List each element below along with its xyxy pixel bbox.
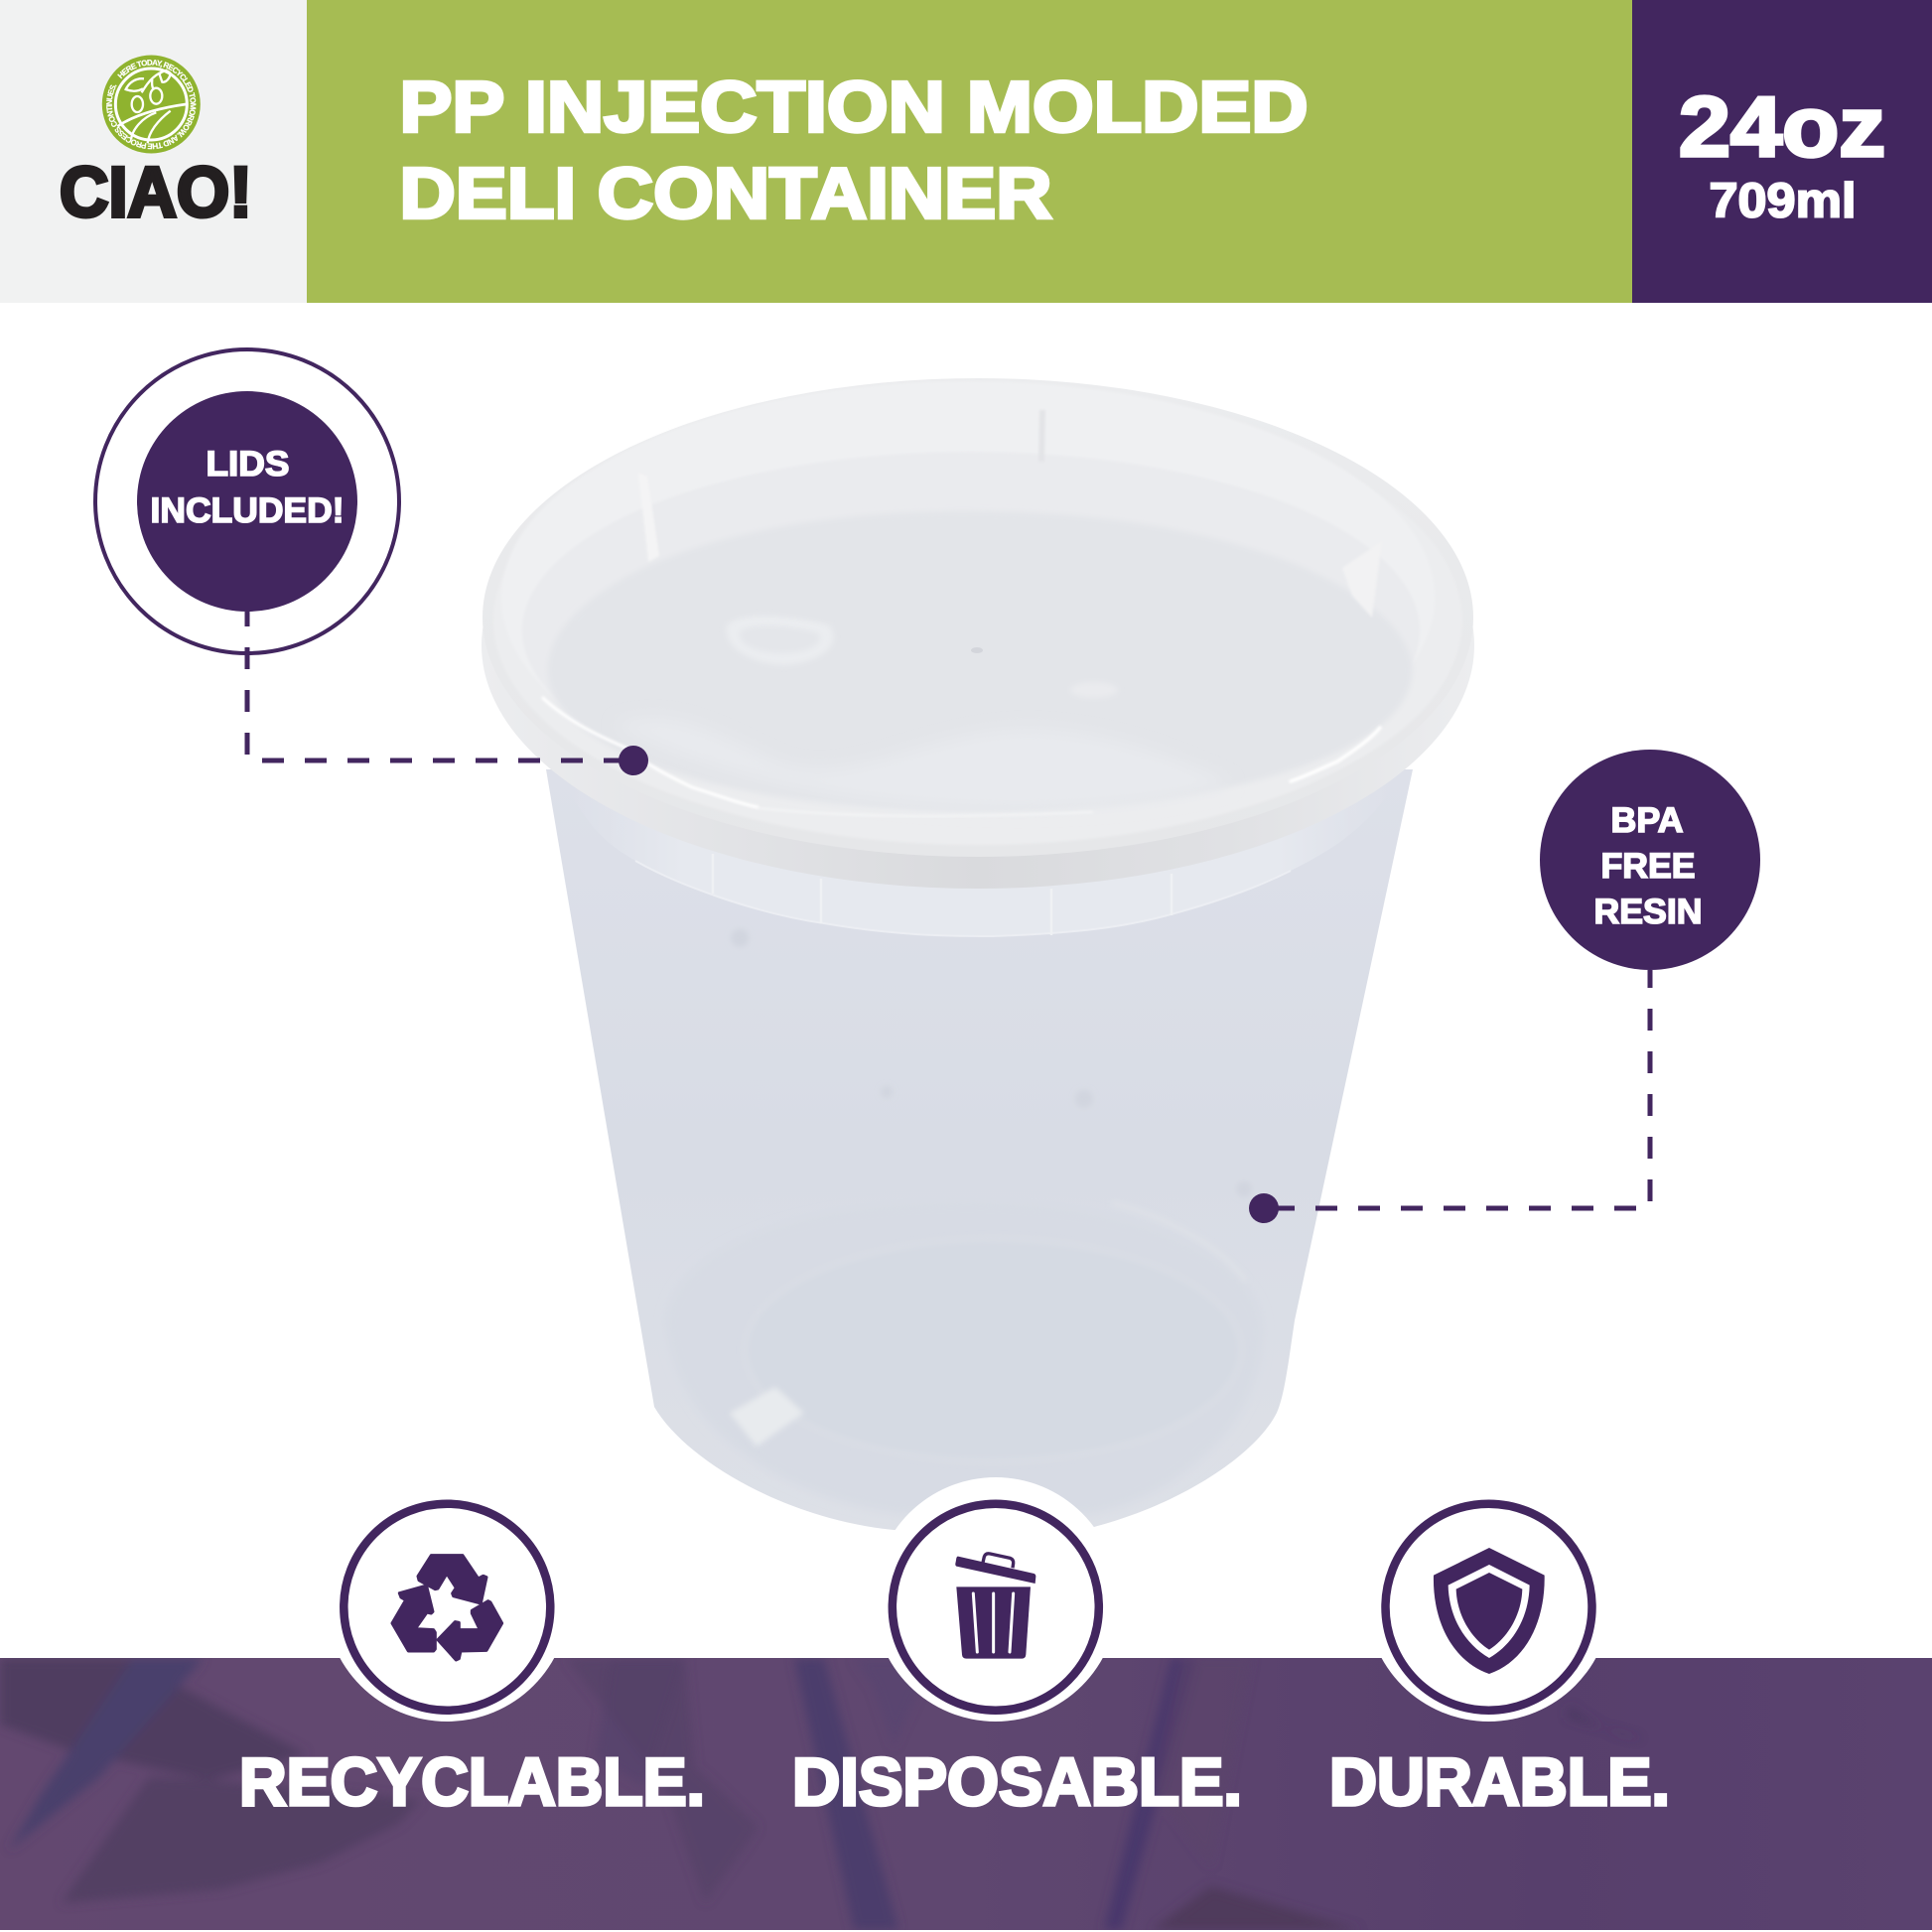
lid outer rim <box>483 378 1473 857</box>
callout text <box>1594 800 1702 931</box>
label: recyclable: RECYCLABLE. <box>239 1744 705 1820</box>
product image: deli container with lid <box>482 378 1474 1530</box>
callout ring <box>95 349 399 653</box>
callout dot <box>1249 1193 1279 1223</box>
icon halo: recyclable <box>325 1477 569 1722</box>
title: DELI CONTAINER <box>399 155 1052 234</box>
callout: lids included <box>95 349 648 775</box>
lid inner edge <box>501 381 1435 814</box>
wordmark: CIAO!: CIAO! <box>60 154 252 232</box>
title: PP INJECTION MOLDED <box>399 68 1309 147</box>
label: durable: DURABLE. <box>1329 1744 1670 1820</box>
callout text: RESIN <box>1594 892 1702 931</box>
lid inner wall <box>522 452 1420 809</box>
panel: title banner <box>307 0 1632 303</box>
lid edge highlights <box>543 698 1380 816</box>
callout text: INCLUDED! <box>151 490 344 530</box>
callout disc <box>137 391 357 612</box>
icon: recycle <box>344 1504 550 1711</box>
lid flat panel <box>548 511 1412 812</box>
callout text: BPA <box>1610 800 1684 840</box>
lid surface details <box>616 617 1231 809</box>
callout text <box>151 444 344 530</box>
callout dot <box>619 746 648 775</box>
size label: 709ml <box>1710 175 1857 228</box>
title <box>399 68 1309 234</box>
callout connector <box>1273 970 1650 1208</box>
panel: purple foliage band <box>0 1657 1932 1930</box>
panel: logo background <box>0 0 307 303</box>
callout text: LIDS <box>207 444 290 483</box>
icon halo: durable <box>1366 1477 1610 1722</box>
lid tabs <box>638 410 1382 618</box>
container body <box>546 769 1413 1530</box>
callout text: FREE <box>1600 846 1696 886</box>
lid rim soft highlight <box>493 396 1462 845</box>
container lower rim <box>482 402 1474 889</box>
icon: recycled badge: HERE TODAY, RECYCLED TOMORROW. AND THE PROCESS CONTINUES. <box>106 60 197 149</box>
icon: trash can <box>893 1504 1099 1711</box>
icon halo: disposable <box>874 1477 1118 1722</box>
callout connector <box>247 612 625 760</box>
icon: shield <box>1386 1504 1592 1711</box>
size label <box>1679 80 1885 228</box>
size label: 24oz <box>1679 80 1885 175</box>
container base <box>665 1201 1263 1514</box>
callout: BPA free resin <box>1249 750 1760 1223</box>
label: disposable: DISPOSABLE. <box>792 1744 1242 1820</box>
panel: size banner <box>1632 0 1932 303</box>
logo: Ciao badge and wordmark <box>60 56 252 232</box>
callout disc <box>1540 750 1760 970</box>
container marks <box>731 929 1252 1197</box>
container label strip <box>566 784 1395 936</box>
